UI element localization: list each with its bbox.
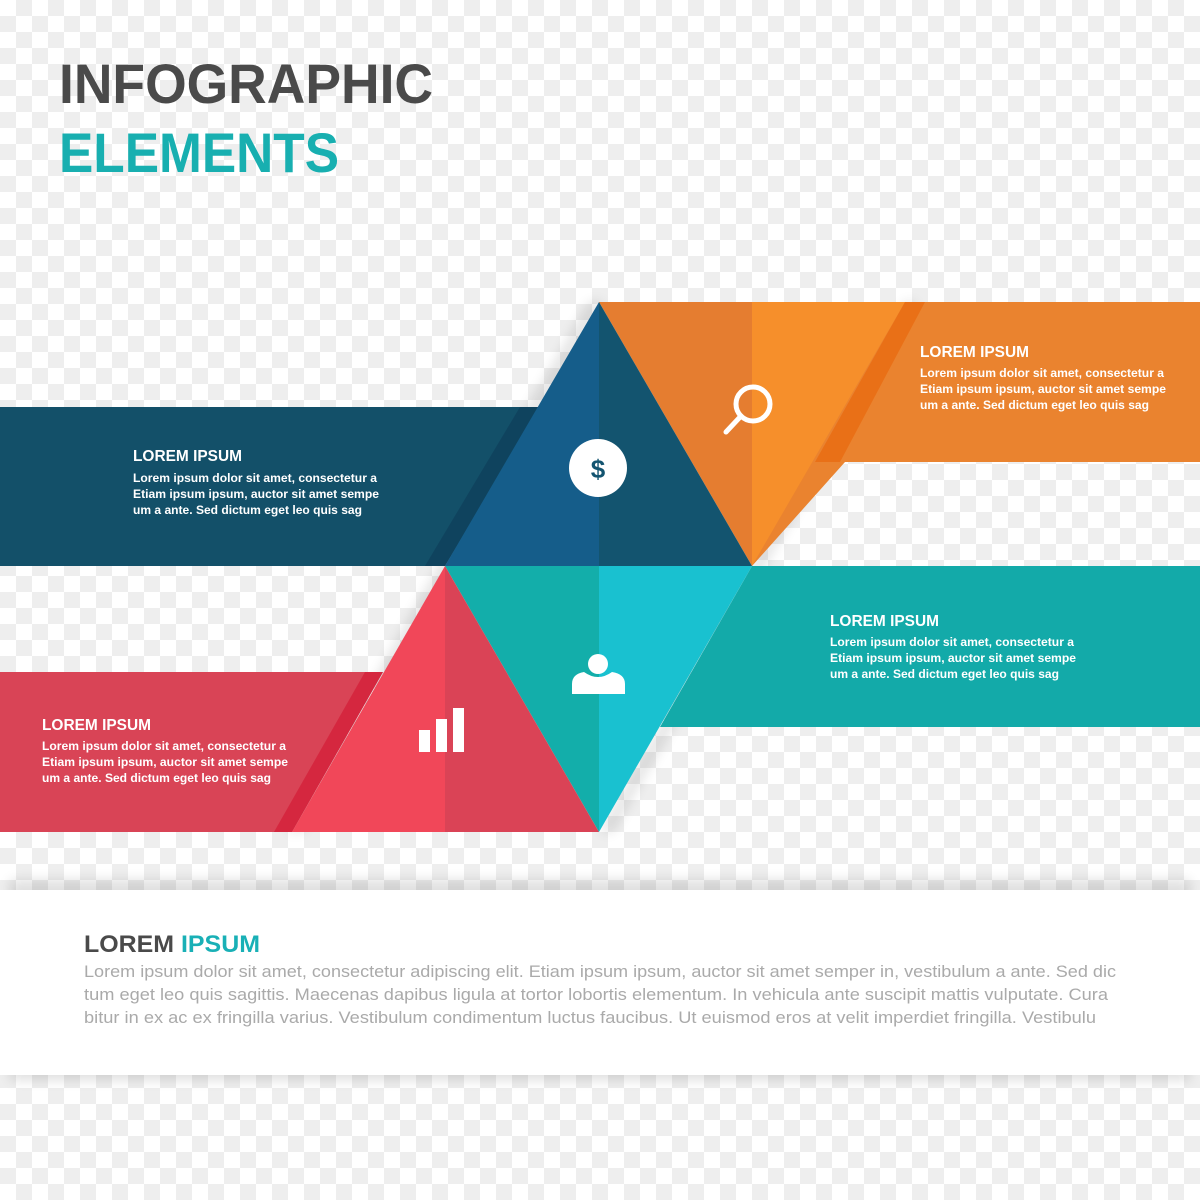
- panel: dark blue band: LOREM IPSUM: [133, 448, 242, 465]
- icon: dollar: [569, 439, 627, 497]
- icon: magnifier: [726, 387, 770, 432]
- panel: red band: Etiam ipsum ipsum, auctor sit amet sempe: [42, 755, 288, 769]
- panel: dark blue band: [0, 407, 540, 566]
- panel: bottom text: bitur in ex ac ex fringilla varius. Vestibulum condimentum luctus faucibus. Ut euismod eros at velit imperdiet fringilla. Vestibulu: [84, 1009, 1096, 1027]
- panel: bottom text: Lorem ipsum dolor sit amet, consectetur adipiscing elit. Etiam ipsum ipsum, auctor sit amet semper in, vestibulum a ante. Sed dic: [84, 963, 1116, 981]
- panel: bottom text: LOREM IPSUM: [84, 931, 260, 958]
- panel: teal band: [660, 566, 1200, 727]
- icon: bar chart: [419, 708, 464, 752]
- panel: orange band: Etiam ipsum ipsum, auctor sit amet sempe: [920, 382, 1166, 396]
- panel: red band: um a ante. Sed dictum eget leo quis sag: [42, 771, 271, 785]
- title: ELEMENTS: [59, 121, 339, 184]
- panel: dark blue band: Etiam ipsum ipsum, auctor sit amet sempe: [133, 487, 379, 501]
- panel: dark blue band: Lorem ipsum dolor sit amet, consectetur a: [133, 471, 377, 485]
- panel: dark blue band: um a ante. Sed dictum eget leo quis sag: [133, 503, 362, 517]
- panel: teal band: LOREM IPSUM: [830, 613, 939, 630]
- panel: teal band: um a ante. Sed dictum eget leo quis sag: [830, 667, 1059, 681]
- panel: red band: LOREM IPSUM: [42, 717, 151, 734]
- panel: teal band: Etiam ipsum ipsum, auctor sit amet sempe: [830, 651, 1076, 665]
- icon: dollar: $: [591, 454, 606, 484]
- panel: teal band: Lorem ipsum dolor sit amet, consectetur a: [830, 635, 1074, 649]
- panel: orange band: LOREM IPSUM: [920, 344, 1029, 361]
- panel: orange band: [752, 302, 1200, 566]
- panel: blue triangle: [445, 302, 752, 566]
- panel: red band: Lorem ipsum dolor sit amet, consectetur a: [42, 739, 286, 753]
- title: INFOGRAPHIC: [59, 52, 433, 115]
- panel: teal triangle: [445, 566, 752, 832]
- panel: bottom text: tum eget leo quis sagittis. Maecenas dapibus ligula at tortor lobortis elementum. In vehicula ante suscipit mattis vulputate. Cura: [84, 986, 1109, 1004]
- panel: bottom text: [0, 890, 1200, 1075]
- bottom panel shadow: [10, 880, 1190, 1080]
- shadows: [288, 302, 917, 832]
- panel: orange band: Lorem ipsum dolor sit amet, consectetur a: [920, 366, 1164, 380]
- icon: person: [572, 654, 625, 694]
- title: [59, 52, 433, 184]
- panel: orange band: um a ante. Sed dictum eget leo quis sag: [920, 398, 1149, 412]
- panel: red band: [0, 672, 383, 832]
- panel: red triangle: [292, 566, 599, 832]
- panel: orange triangle: [599, 302, 770, 566]
